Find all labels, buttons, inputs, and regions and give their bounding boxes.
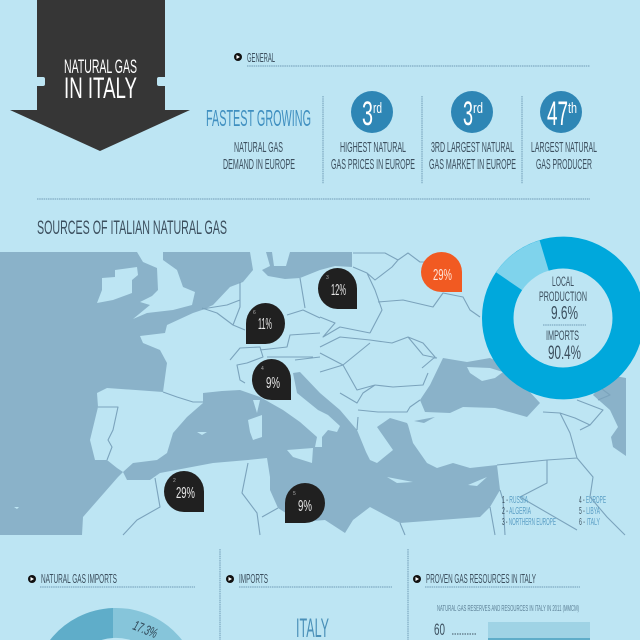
stat: 3rd largest market: 3 [463,95,473,133]
map pin: 12%: 12% [331,282,346,299]
text: FASTEST GROWING [206,105,311,131]
donut: natural gas imports [50,608,182,640]
caspian sea [593,375,626,456]
title banner arrow [10,0,190,151]
map pin: 12% [318,268,357,309]
stat: 3rd highest prices: 3 [362,95,373,133]
section heading: imports: IMPORTS [239,571,268,586]
islands [14,400,487,509]
section heading: proven gas resources [413,571,580,587]
map pin: 11%: 6 [253,310,256,316]
donut: local production vs imports: IMPORTS [546,328,579,343]
map legend: 5 - LIBYA [579,506,600,517]
ireland [97,267,138,303]
map pin: 11%: 11% [258,316,272,333]
map pin: 9% north Italy: 4 [261,366,264,372]
map pin: 11% [246,303,285,344]
map legend: 2 - ALGERIA [502,506,531,517]
map pin: Libya 9%: 9% [298,498,312,515]
map pin: Russia 29% [421,252,462,292]
bar chart: natural gas reserves [434,604,590,640]
map pin: 9% north Italy [252,359,291,400]
heading: sources of Italian natural gas: SOURCES OF ITALIAN NATURAL GAS [37,218,227,239]
section heading: natural gas imports: NATURAL GAS IMPORTS [41,571,117,586]
title banner arrow: NATURAL GAS [64,57,137,78]
text: GAS MARKET IN EUROPE [429,157,516,173]
stat: 3rd highest prices: HIGHEST NATURAL [340,140,406,156]
atlantic and north sea [0,252,253,535]
baltic [262,252,352,279]
map legend: 1 - RUSSIA [502,495,528,506]
donut: local production vs imports: 90.4% [548,343,581,364]
stat: fastest growing [206,105,311,173]
stat: 3rd largest market: rd [473,100,483,117]
stat: 47th largest producer: 47 [547,95,568,133]
stat: 47th largest producer [531,91,597,173]
stat: 47th largest producer: th [568,100,577,117]
stat: 3rd highest prices: rd [373,100,382,117]
bar chart: natural gas reserves: 60 [434,620,445,639]
map pin: Russia 29%: 29% [433,267,452,284]
donut: local production vs imports: PRODUCTION [539,289,587,304]
donut: local production vs imports: LOCAL [552,274,574,289]
map pin: Algeria 29%: 2 [173,478,176,484]
donut: local production vs imports [482,237,640,399]
great britain [133,252,195,319]
map pin: Algeria 29%: 29% [176,485,195,502]
vertical dividers [323,96,522,184]
map legend: 3 - NORTHERN EUROPE [502,517,556,528]
sea of marmara [414,417,435,423]
map legend: 4 - EUROPE [579,495,606,506]
mediterranean [123,372,500,533]
stat: fastest growing: DEMAND IN EUROPE [223,157,295,173]
bottom vertical dividers [220,549,408,640]
black sea [420,358,540,417]
map pin: Libya 9% [285,483,325,523]
map pin: 12%: 3 [326,275,329,281]
country borders [98,253,625,535]
map legend: 6 - ITALY [579,517,600,528]
stat: fastest growing: NATURAL GAS [234,140,283,156]
section heading: general [234,50,590,66]
stat: 3rd largest market [429,91,516,173]
crimea [467,367,503,381]
donut: local production vs imports: 9.6% [551,302,578,323]
section heading: imports [226,571,392,587]
map pin: 9% north Italy: 9% [266,375,280,392]
text: 3RD LARGEST NATURAL [431,140,514,156]
title banner arrow: IN ITALY [64,72,137,105]
map pin: Algeria 29% [164,471,204,512]
map of Europe [0,252,626,535]
stat: 3rd highest prices [331,91,415,173]
map pin: Libya 9%: 5 [293,491,296,497]
section heading: general: GENERAL [247,50,275,65]
map legend [502,495,606,528]
text: GAS PRICES IN EUROPE [331,157,415,173]
